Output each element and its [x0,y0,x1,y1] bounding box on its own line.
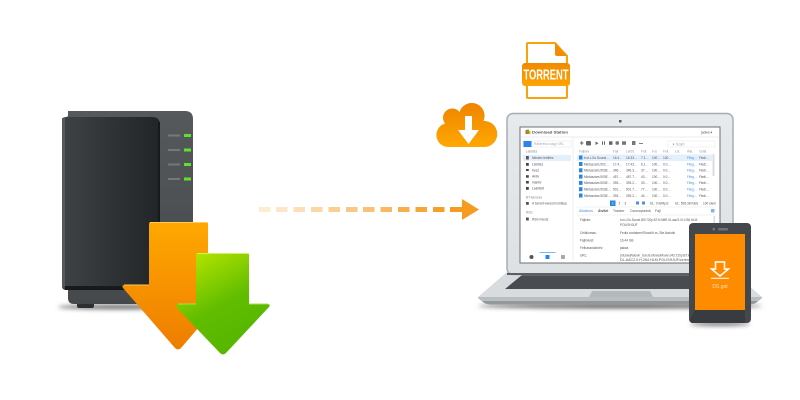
detail tabs: Tracker [613,209,625,213]
torrent table: Fájlnév [579,149,590,153]
torrent table: Álla. [687,149,693,153]
sidebar: Inaktív [532,180,542,184]
torrent table: Mintaszám.503E… [584,188,611,192]
detail tabs [577,207,716,215]
sidebar: RSS [526,210,533,214]
sidebar: Leállított [532,187,544,191]
detail rows [580,216,715,262]
torrent table: 100… [652,162,661,166]
torrent table: 393… [613,194,622,198]
cloud download icon [436,103,497,147]
torrent table: Fileg… [687,156,697,160]
detail rows: Fedia container/Shoot/b.m.-Ste.Naturik [620,231,676,235]
detail rows: Felhasználónév: [580,246,603,250]
sidebar: Letöltés [526,149,538,153]
torrent table: 33… [641,181,648,185]
detail rows: URL: [580,254,587,258]
torrent table: 7.1… [641,156,649,160]
torrent table: 44… [641,194,648,198]
smartphone with DS get [689,223,751,326]
torrent table: Mintaszám.503E… [584,175,611,179]
torrent table: Fledi… [699,169,709,173]
pagination bar [610,200,716,206]
detail tabs: Fájl [655,209,661,213]
laptop shadow [478,304,762,308]
pagination bar: 3 [624,202,626,206]
torrent table: Fájl [613,149,618,153]
torrent table: 100… [652,169,661,173]
pagination bar: 2 [618,202,620,206]
torrent table: Fileg… [687,194,697,198]
torrent table: 16.4… [613,156,622,160]
sidebar: Minden letöltés [532,156,554,160]
status lights [168,134,191,180]
torrent table: 43… [641,175,648,179]
torrent table: Fledi… [699,194,709,198]
torrent table: Fileg… [687,188,697,192]
torrent table: Fileg… [687,169,697,173]
dashed arrow [259,199,479,220]
torrent table: Letölt. [626,149,635,153]
detail rows: Fájlnév: [580,218,591,222]
sidebar: Rákeresni-nagy URL [534,142,564,146]
torrent table: 100… [652,175,661,179]
detail rows: [rdUow]Ndown_SunJe.Movie/Movie.043.720p.BT.H [620,254,691,258]
laptop [478,114,762,308]
torrent table: 6.1… [641,162,649,166]
toolbar: ▼ Szűrő [672,142,685,146]
torrent table: Let. [675,149,680,153]
torrent table: 501… [613,188,622,192]
toolbar [580,141,715,147]
window header: jadwa ▾ [700,130,713,134]
torrent table: Fledi… [699,162,709,166]
torrent table: 346.3… [626,169,637,173]
pagination bar: DL: 0 B/Mp/s [650,202,669,206]
torrent table: 17.4… [613,162,622,166]
torrent table: 457.7… [626,175,637,179]
torrent table: Mintaszám.503E… [584,181,611,185]
torrent table: 17.43… [626,162,637,166]
torrent table: Fledi… [699,188,709,192]
window header [521,130,719,137]
torrent file icon: TORRENT [524,68,569,84]
torrent table: 100… [652,156,661,160]
torrent table: Célál. [699,149,707,153]
sidebar: Kész [532,168,539,172]
torrent table: Felt. [663,149,669,153]
torrent table: 0.0… [663,175,671,179]
torrent table: Mintaszám.502… [584,162,609,166]
torrent table: Mintaszám.503E… [584,169,611,173]
torrent table: Mintaszám.503E… [584,194,611,198]
torrent table: 393.2… [626,194,637,198]
sidebar [523,137,573,262]
torrent table: 100… [663,156,672,160]
sidebar: BT-keresés [526,196,543,200]
NAS device [58,111,193,310]
torrent table: Felt. [641,149,647,153]
sidebar: RSS Feeds [532,218,549,222]
torrent table: Fledi… [699,181,709,185]
orange download arrow [122,222,235,350]
detail rows: jadwa [619,246,629,250]
torrent table: 393… [613,181,622,185]
torrent table: 100… [652,181,661,185]
window header: Download Station [532,130,569,134]
laptop base [478,272,762,299]
torrent table: 0.0… [663,181,671,185]
detail rows: DL.AAC2.0.H.264.HLM-POLISHJUF.torrent [620,258,690,262]
torrent table: Fileg… [687,162,697,166]
detail rows: Célállomás: [580,231,597,235]
torrent table [577,149,714,198]
icon: download arrow [711,262,729,279]
torrent table: 100… [652,194,661,198]
torrent table: 346… [613,169,622,173]
phone screen [695,234,745,310]
torrent table: 37… [641,169,648,173]
torrent table: Fledi… [699,156,709,160]
torrent table: Fileg… [687,181,697,185]
pagination bar: 100 elem [703,202,716,206]
detail rows: Fájlméret: [580,238,594,242]
sidebar: A torrent-kereső indítása [532,202,567,206]
torrent table: 16.33… [626,156,637,160]
pagination bar: UL: 593.38 KB/s [675,202,699,206]
sidebar: Aktív [532,174,539,178]
torrent table: Fol. [652,149,657,153]
torrent table: 501.7… [626,188,637,192]
laptop lid [507,114,733,274]
torrent file icon [522,43,570,98]
torrent table: Fileg… [687,175,697,179]
torrent table: Fledi… [699,175,709,179]
app label: DS get [712,284,728,290]
trackpad [589,291,653,297]
detail rows: POLISHJUF [620,223,638,227]
torrent table: 457… [613,175,622,179]
torrent table: 0.0… [663,169,671,173]
detail tabs: Általános [579,209,593,213]
detail rows: b.m.LGc.Sound.009.720p.BT.H.NMR-5L.aac/2.0.H.264.HLM- [620,218,698,222]
torrent table: 0.0… [663,194,671,198]
app window: Download Station [520,127,720,263]
torrent table: 77… [641,188,648,192]
detail tabs: Csomópontok [630,209,651,213]
torrent table: 393.2… [626,181,637,185]
detail tabs: Átvitel [598,208,608,213]
sidebar: Letöltés [532,162,544,166]
torrent table: b.m.LGc.Sound… [584,156,609,160]
pagination bar: 1 [612,202,614,206]
torrent table: 100… [652,188,661,192]
torrent table: 0.0… [663,162,671,166]
keyboard [505,275,745,289]
detail rows: 16.44 GB [620,238,633,242]
green download arrow [176,253,270,354]
torrent table: 0.0… [663,188,671,192]
